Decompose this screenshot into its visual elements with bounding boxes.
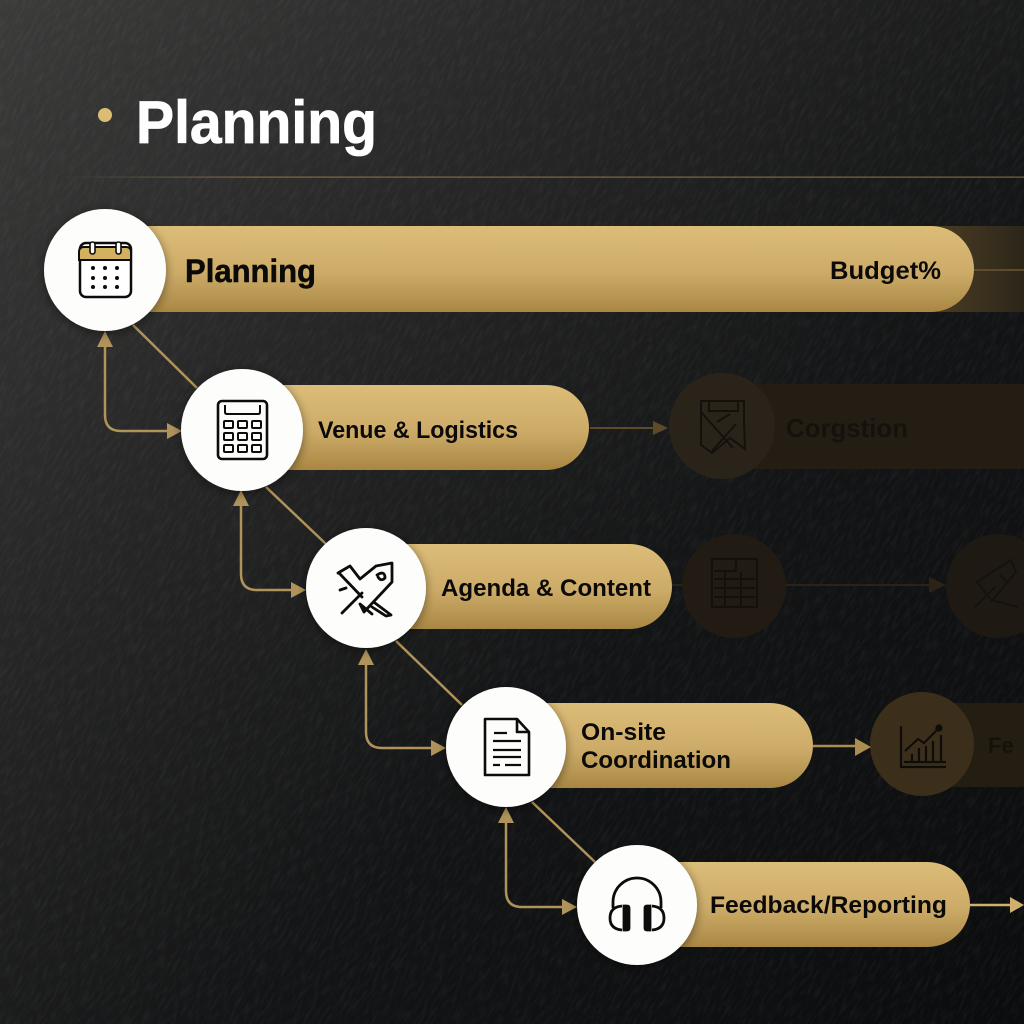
- ghost row: agenda continuation: [672, 534, 1024, 638]
- ghost label: Fe: [988, 733, 1014, 758]
- budget label: Budget%: [830, 257, 941, 285]
- connector: Agenda to On-site: [358, 641, 462, 756]
- ghost calculator icon: [712, 559, 757, 607]
- icon: calculator: [218, 401, 267, 459]
- bar: [105, 226, 974, 312]
- ghost connector: [672, 577, 946, 593]
- node: [181, 369, 303, 491]
- bar: [242, 385, 589, 470]
- node: [306, 528, 426, 648]
- step 1: Planning: [44, 209, 974, 331]
- node: [44, 209, 166, 331]
- chart arrow: [813, 738, 871, 756]
- step 4: On-site Coordination: [446, 687, 813, 807]
- node: [446, 687, 566, 807]
- icon: calendar: [79, 242, 131, 297]
- connector: Planning to Venue: [97, 325, 197, 439]
- label: Planning: [185, 253, 316, 289]
- icon: rocket and tools: [338, 563, 392, 616]
- bar: [506, 703, 813, 788]
- icon: document: [485, 719, 529, 775]
- outgoing arrow: [970, 897, 1024, 913]
- label: Coordination: [581, 747, 731, 774]
- label: Venue & Logistics: [318, 417, 518, 444]
- chart icon: [901, 726, 946, 767]
- step 5: Feedback/Reporting: [577, 845, 1024, 965]
- bar: [366, 544, 672, 629]
- title: Planning: [136, 89, 377, 156]
- ghost rocket icon: [975, 560, 1018, 607]
- ghost map icon: [701, 401, 745, 453]
- ghost row: top bar tail: [930, 226, 1024, 312]
- label: On-site: [581, 719, 666, 746]
- ghost row: chart and Feedback: [813, 692, 1024, 796]
- ghost row: Corgstion: [590, 373, 1024, 479]
- step 2: Venue & Logistics: [181, 369, 589, 491]
- connector: Venue to Agenda: [233, 487, 326, 598]
- label: Feedback/Reporting: [710, 892, 947, 919]
- label: Agenda & Content: [441, 575, 651, 602]
- ghost label: Corgstion: [786, 413, 908, 443]
- node: [577, 845, 697, 965]
- icon: headphones: [610, 878, 664, 930]
- connector: On-site to Feedback: [498, 802, 595, 915]
- step 3: Agenda & Content: [306, 528, 672, 648]
- ghost arrow to map icon: [590, 421, 668, 435]
- bar: [637, 862, 970, 947]
